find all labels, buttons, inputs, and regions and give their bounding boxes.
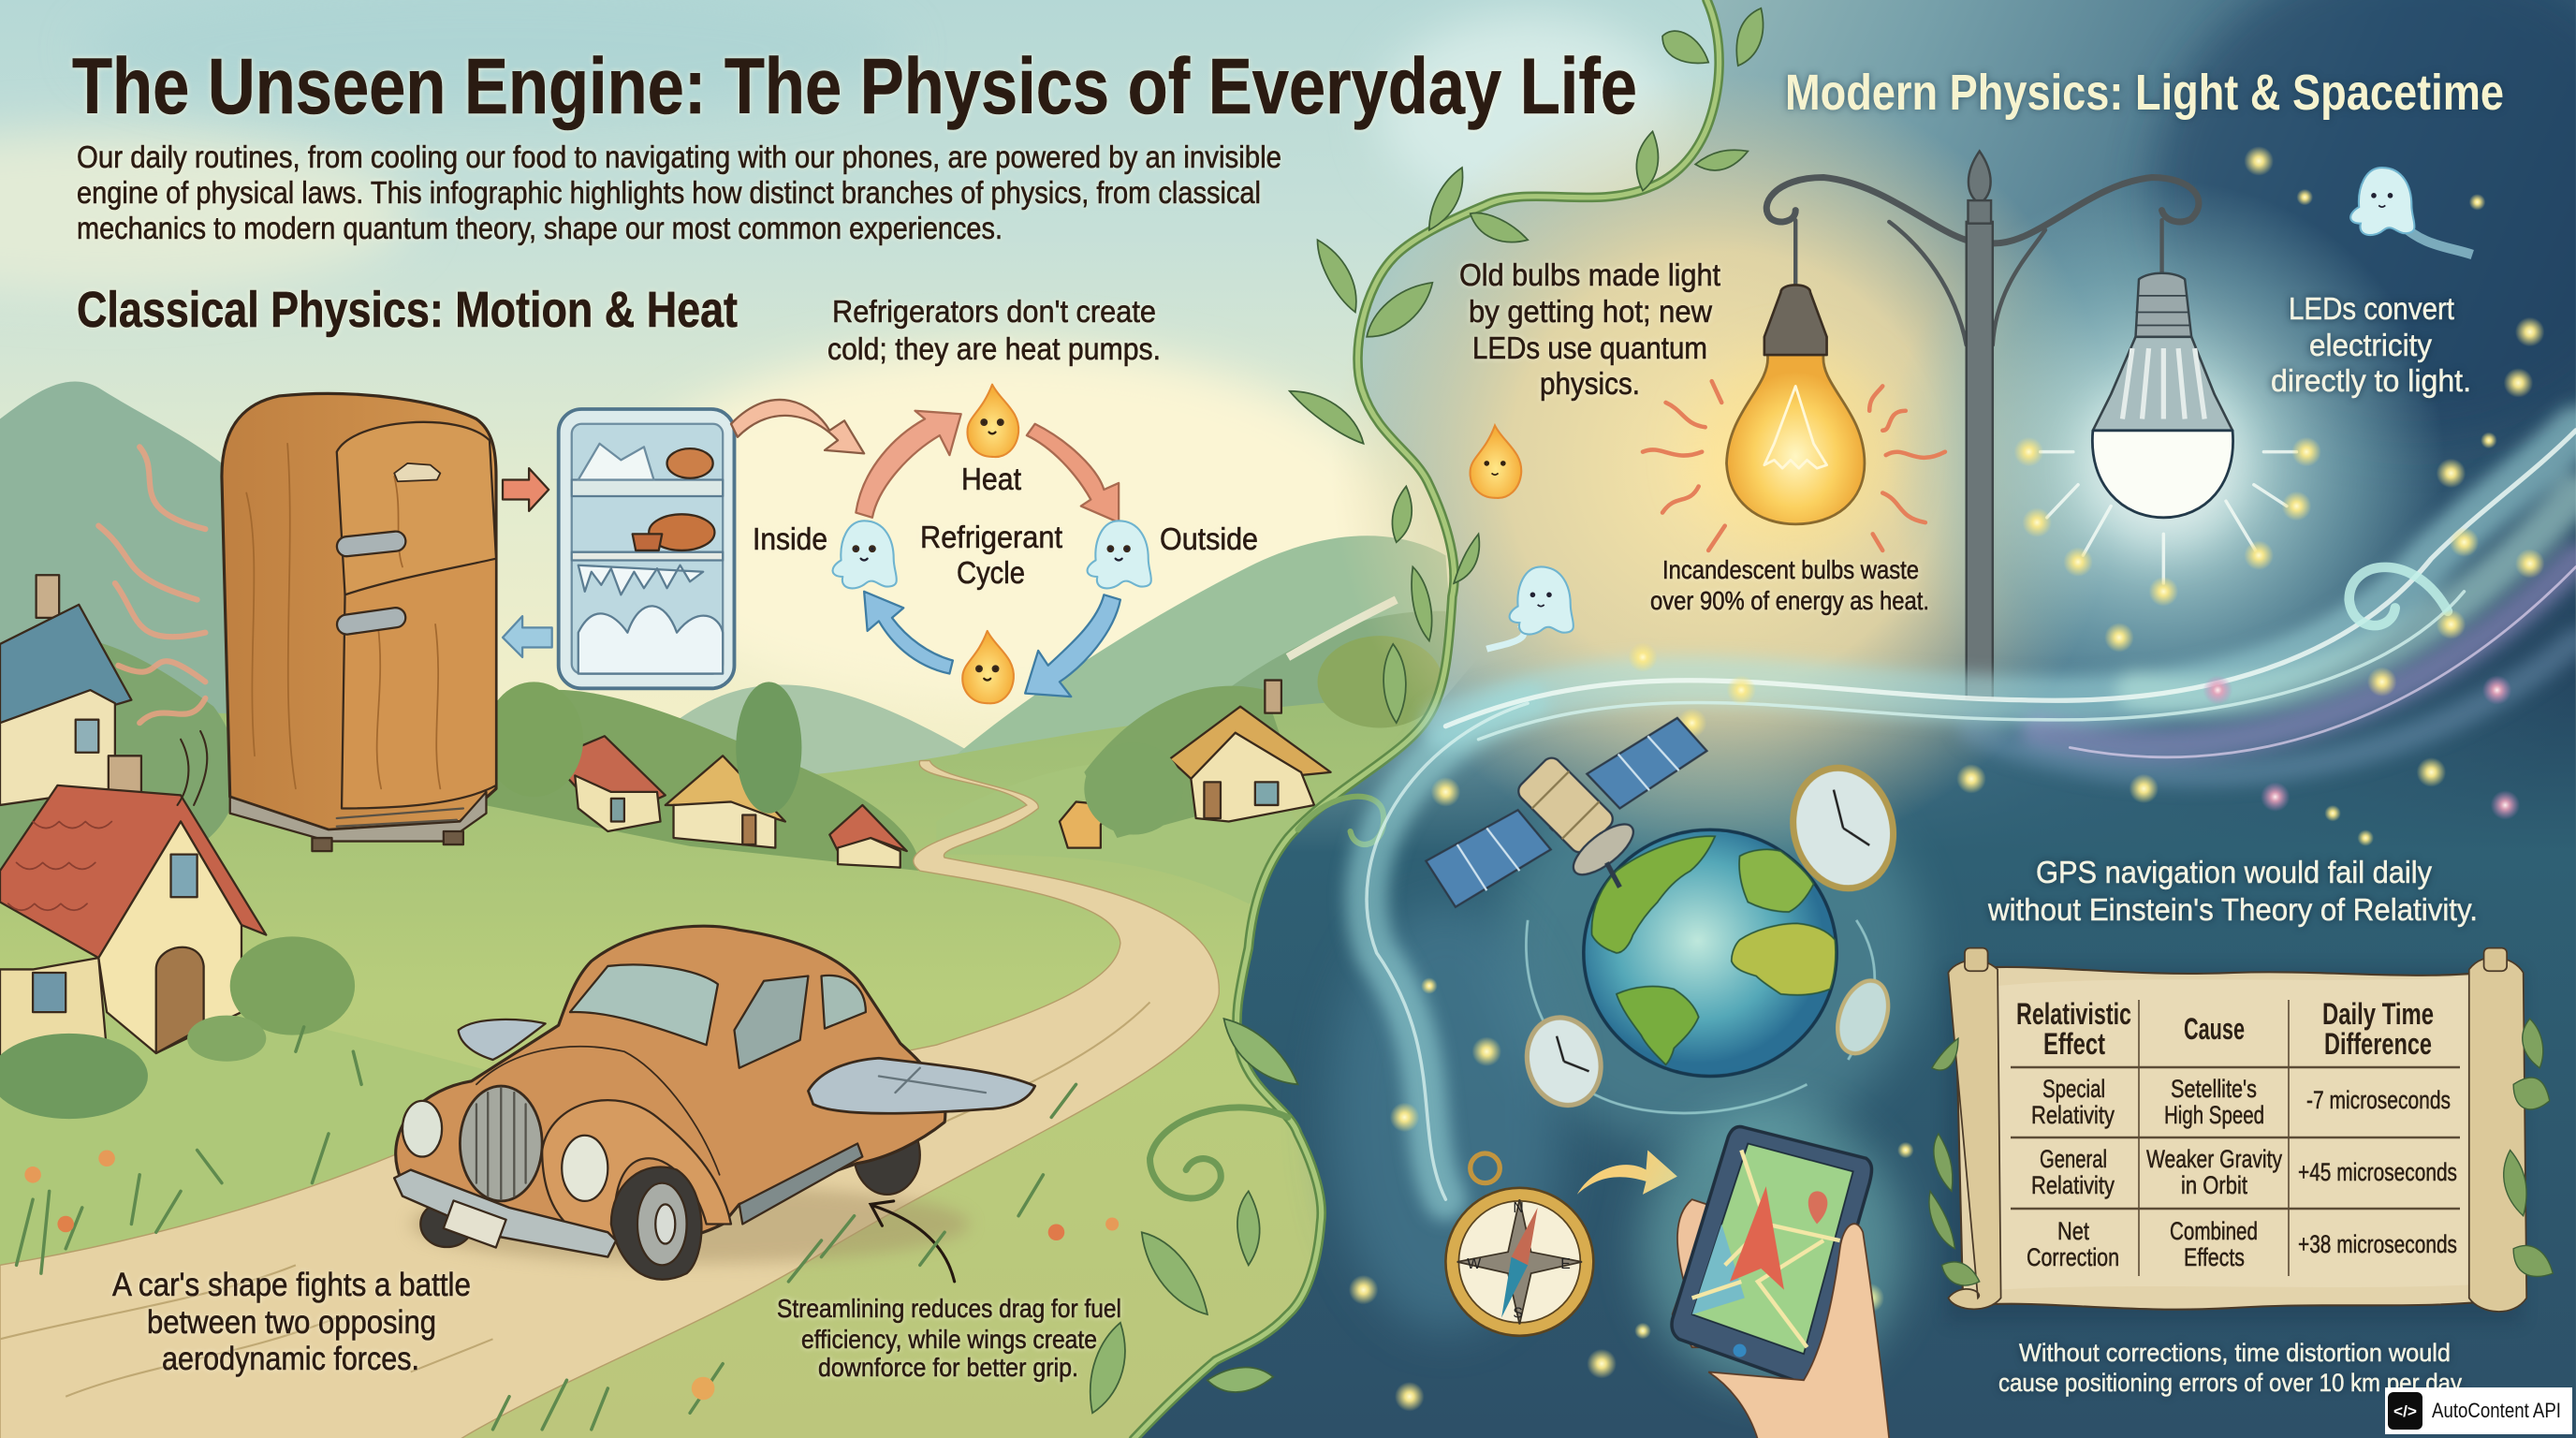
compass: S <box>1513 1306 1523 1322</box>
house: large red roof cottage <box>0 756 266 1068</box>
caption: position errors: cause positioning errors of over 10 km per day. <box>1998 1369 2466 1397</box>
caption: car shape: aerodynamic forces. <box>162 1341 419 1377</box>
house: right thatched cottage <box>1170 681 1331 822</box>
diagram: refrigerant cycle <box>833 385 1151 703</box>
table row: special relativity: Special <box>2042 1075 2105 1103</box>
caption: GPS: without Einstein's Theory of Relativity. <box>1987 892 2478 927</box>
house: blue roof cottage <box>0 575 131 805</box>
table row: general relativity: in Orbit <box>2181 1171 2247 1199</box>
caption: streamlining <box>777 1294 1121 1382</box>
caption: streamlining: Streamlining reduces drag for fuel <box>777 1294 1121 1323</box>
heat waves <box>98 447 205 723</box>
intro paragraph: mechanics to modern quantum theory, shape our most common experiences. <box>77 211 1003 245</box>
phone body <box>1672 1126 1871 1382</box>
badge: AutoContent API: </> <box>2393 1402 2417 1420</box>
caption: incandescent waste: over 90% of energy as heat. <box>1650 586 1929 615</box>
phone glow <box>1641 1109 1904 1388</box>
dirt road winding through the meadow <box>0 761 1219 1438</box>
caption: refrigerators: Refrigerators don't create <box>832 294 1156 329</box>
table row: general relativity: Relativity <box>2031 1171 2115 1199</box>
table row: special relativity: High Speed <box>2164 1101 2264 1129</box>
intro paragraph <box>77 139 1281 245</box>
caption: car shape <box>112 1267 471 1377</box>
lamp post <box>1766 151 2199 698</box>
caption: refrigerators <box>827 294 1161 366</box>
compass: W <box>1467 1256 1481 1272</box>
table row: net correction: Effects <box>2184 1243 2245 1271</box>
table row: special relativity: -7 microseconds <box>2306 1086 2451 1114</box>
character: ghost upper right <box>2350 168 2472 255</box>
clock: large <box>1780 757 1906 899</box>
grille <box>460 1086 542 1201</box>
cycle labels: Refrigerant <box>920 520 1062 554</box>
caption: GPS <box>1987 855 2478 927</box>
heat squiggles <box>1643 381 1945 550</box>
caption: old bulbs <box>1459 257 1720 401</box>
sill <box>739 1143 862 1224</box>
hand back fingers <box>1673 1199 1741 1347</box>
refrigerator: open interior with food and ice <box>559 409 734 688</box>
caption: LEDs: directly to light. <box>2271 363 2471 398</box>
character: ghost lower <box>1486 566 1573 649</box>
rear wheel <box>855 1116 920 1195</box>
compass: E <box>1560 1256 1571 1272</box>
refrigerator: wooden closed fridge with heat waves <box>98 393 496 851</box>
table row: special relativity: Setellite's <box>2171 1075 2257 1103</box>
caption: refrigerators: cold; they are heat pumps. <box>827 331 1161 366</box>
badge: AutoContent API <box>2385 1387 2572 1434</box>
caption: LEDs: electricity <box>2309 328 2432 362</box>
character: left ghost <box>833 521 897 588</box>
caption: car shape: between two opposing <box>147 1304 436 1341</box>
left wing <box>459 1020 546 1060</box>
table header: Cause <box>2184 1012 2245 1046</box>
quantum light wave ribbon <box>1367 431 2576 1199</box>
grass and flowers <box>17 1027 1119 1430</box>
compass <box>1445 1153 1593 1336</box>
table row: general relativity: Weaker Gravity <box>2146 1145 2282 1173</box>
caption: incandescent waste <box>1650 555 1929 615</box>
cycle labels <box>753 462 1258 590</box>
table grid lines <box>2011 1000 2460 1276</box>
cycle labels: Heat <box>961 462 1021 496</box>
caption: GPS: GPS navigation would fail daily <box>2036 855 2432 889</box>
table header: Difference <box>2324 1027 2432 1061</box>
cycle labels: Cycle <box>957 555 1025 590</box>
night side: modern physics background <box>1134 0 2576 1438</box>
table row: general relativity: General <box>2040 1145 2107 1173</box>
caption: streamlining: efficiency, while wings create <box>801 1325 1097 1354</box>
caption: old bulbs: physics. <box>1540 366 1640 401</box>
table row: general relativity <box>2031 1145 2457 1199</box>
hand <box>1708 1224 1889 1438</box>
bumper <box>394 1170 616 1257</box>
cycle arrow: heat out <box>1027 424 1119 522</box>
arrows between fridge and cycle <box>503 400 864 657</box>
heading: classical physics: Classical Physics: Motion & Heat <box>77 282 738 338</box>
village houses <box>0 575 1331 1119</box>
headlights <box>402 1101 442 1157</box>
cycle labels: Inside <box>753 521 827 556</box>
cycle labels: Outside <box>1160 521 1258 556</box>
character: fire sprite <box>1471 426 1521 498</box>
cycle arrow: cool down <box>1025 594 1120 697</box>
windows <box>570 964 718 1045</box>
cycle arrow: heat up <box>856 411 961 518</box>
yellow arrow <box>1577 1150 1677 1195</box>
compass, arrow, and phone with map <box>1445 1109 1904 1438</box>
table row: net correction: +38 microseconds <box>2298 1230 2457 1258</box>
car body <box>396 926 945 1242</box>
table header: Relativistic <box>2016 997 2131 1031</box>
right wing <box>808 1058 1035 1113</box>
caption: old bulbs: by getting hot; new <box>1469 294 1712 329</box>
LED light rays and dots <box>2041 452 2296 583</box>
scattered glowing particles <box>1349 146 2544 1412</box>
table row: net correction: Net <box>2057 1217 2089 1245</box>
far front wheel <box>420 1201 473 1247</box>
caption: streamlining: downforce for better grip. <box>818 1353 1078 1382</box>
table row: net correction <box>2027 1217 2457 1271</box>
table row: net correction: Combined <box>2170 1217 2258 1245</box>
house: mid thatched <box>666 756 785 848</box>
table row: special relativity <box>2031 1075 2451 1129</box>
compass: N <box>1513 1200 1524 1216</box>
table header: Effect <box>2043 1027 2105 1061</box>
orbit swirls <box>1526 920 1875 1113</box>
house: mid red roof <box>550 736 666 831</box>
vine dividing day and night <box>1090 0 1764 1438</box>
clock: lower left <box>1517 1009 1611 1114</box>
LED bulb <box>2085 273 2243 547</box>
caption: incandescent waste: Incandescent bulbs waste <box>1662 555 1919 584</box>
caption: LEDs <box>2271 291 2471 398</box>
intro paragraph: Our daily routines, from cooling our food to navigating with our phones, are powered by an invisible <box>77 139 1281 174</box>
car with wings <box>394 926 1035 1280</box>
incandescent bulb <box>1693 285 1897 553</box>
table header <box>2016 997 2434 1061</box>
character: right ghost <box>1088 521 1151 588</box>
table row: special relativity: Relativity <box>2031 1101 2115 1129</box>
front wheel <box>611 1167 701 1280</box>
satellite <box>1426 718 1706 907</box>
character: top flame <box>968 385 1018 457</box>
caption: car shape: A car's shape fights a battle <box>112 1267 471 1303</box>
caption: position errors: Without corrections, time distortion would <box>2019 1339 2451 1367</box>
table row: general relativity: +45 microseconds <box>2298 1158 2457 1186</box>
title: The Unseen Engine: The Physics of Everyday Life <box>72 42 1637 130</box>
lamp post with bulbs <box>1471 151 2472 698</box>
panel: scroll table of relativistic effects <box>1929 948 2553 1323</box>
cycle arrow: cool return <box>864 592 953 674</box>
table header: Daily Time <box>2322 997 2434 1031</box>
intro paragraph: engine of physical laws. This infographic highlights how distinct branches of physics, from classical <box>77 175 1261 210</box>
house: small red roof <box>829 805 907 868</box>
character: bottom flame <box>962 631 1014 703</box>
arrow: drag callout <box>871 1201 955 1282</box>
table row: net correction: Correction <box>2027 1243 2119 1271</box>
caption: old bulbs: LEDs use quantum <box>1472 330 1707 365</box>
house: small orange <box>1060 801 1110 848</box>
bushes around the large cottage <box>0 682 1183 1119</box>
caption: LEDs: LEDs convert <box>2289 291 2454 326</box>
scroll parchment <box>1929 948 2553 1323</box>
GPS illustration: satellite, Earth and clocks <box>1426 718 1906 1114</box>
Earth <box>1584 829 1837 1077</box>
caption: position errors <box>1998 1339 2466 1397</box>
clock: lower right <box>1828 974 1897 1061</box>
caption: old bulbs: Old bulbs made light <box>1459 257 1720 292</box>
